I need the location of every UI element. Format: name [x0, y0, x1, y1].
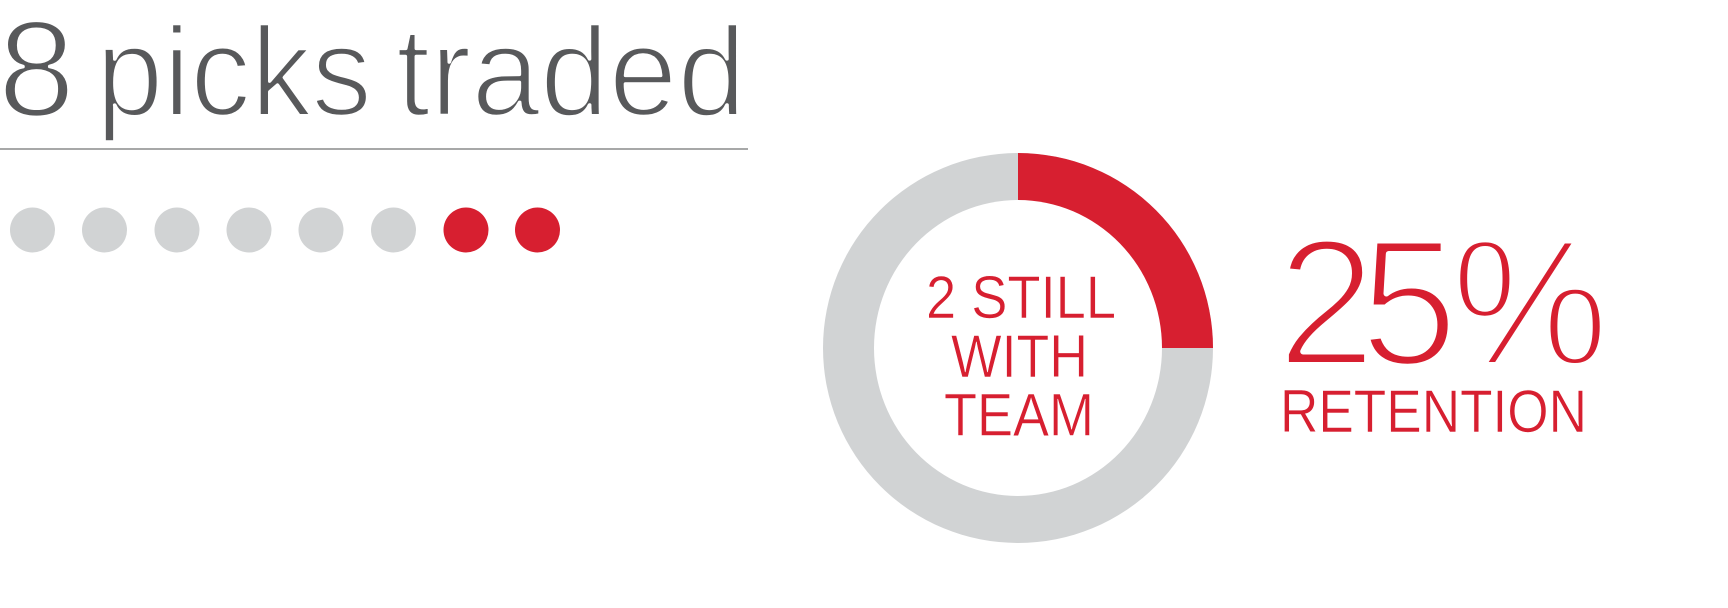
title: 8 picks traded: picks — [96, 0, 372, 142]
caption: retention: RETENTION — [1280, 378, 1587, 445]
donut label: 2 still with team — [926, 264, 1116, 448]
dot row: 6 grey and 2 red picks — [10, 208, 560, 252]
donut label: 2 still with team: WITH — [951, 323, 1088, 390]
donut chart: 25% retention — [823, 153, 1213, 543]
big number: 25% — [1277, 202, 1609, 404]
big number: 25%: 5 — [1360, 202, 1458, 404]
donut label: 2 still with team: 2 STILL — [926, 264, 1116, 331]
title: 8 picks traded: traded — [396, 0, 746, 142]
big number: 25%: % — [1451, 202, 1609, 404]
big number: 25%: 2 — [1277, 202, 1376, 404]
title: 8 picks traded — [0, 0, 746, 146]
donut label: 2 still with team: TEAM — [944, 382, 1094, 448]
